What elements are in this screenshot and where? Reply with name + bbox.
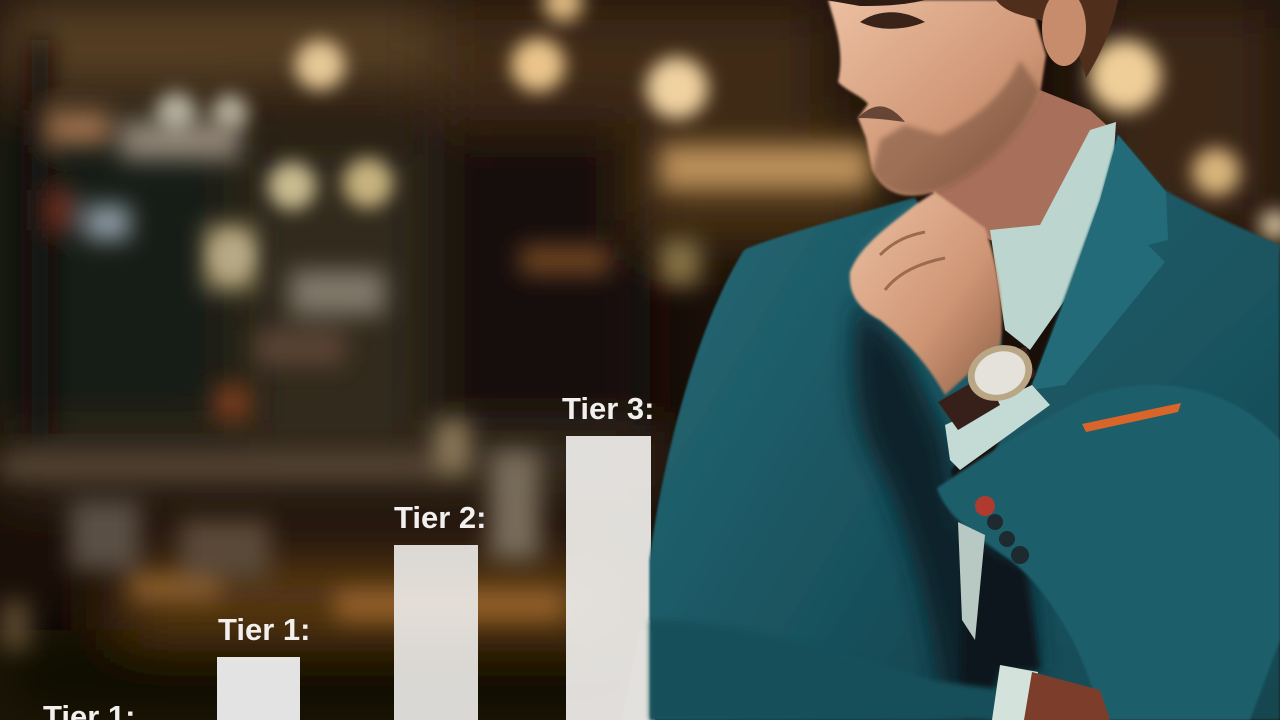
- shirt cuff and placket: [945, 385, 1050, 720]
- man in teal suit: [622, 0, 1280, 720]
- beard: [872, 60, 1040, 195]
- lapel: [1030, 135, 1168, 390]
- jacket shadow: [853, 300, 1040, 720]
- hair: [996, 0, 1118, 78]
- bar chart: tiers: [43, 391, 654, 720]
- ear: [1042, 0, 1086, 66]
- eye: [860, 12, 925, 29]
- wrist skin: [1024, 672, 1110, 720]
- neck: [930, 90, 1112, 250]
- hand: [850, 192, 1002, 395]
- label: tier 1: Tier 1:: [218, 612, 310, 647]
- label: tier 3: Tier 3:: [562, 391, 654, 426]
- moustache: [858, 106, 905, 122]
- pocket square: [1082, 403, 1181, 432]
- jacket: [650, 135, 1280, 720]
- cuff buttons: [975, 496, 1029, 564]
- face: [828, 0, 1046, 196]
- bar: tier 3: [566, 436, 651, 720]
- bar: tier 1: [217, 657, 300, 720]
- shirt: [990, 122, 1116, 350]
- sleeve: [937, 385, 1280, 720]
- watch: [938, 336, 1041, 430]
- label: tier 2: Tier 2:: [394, 500, 486, 535]
- bar: tier 2: [394, 545, 478, 720]
- eyebrow: [826, 0, 925, 6]
